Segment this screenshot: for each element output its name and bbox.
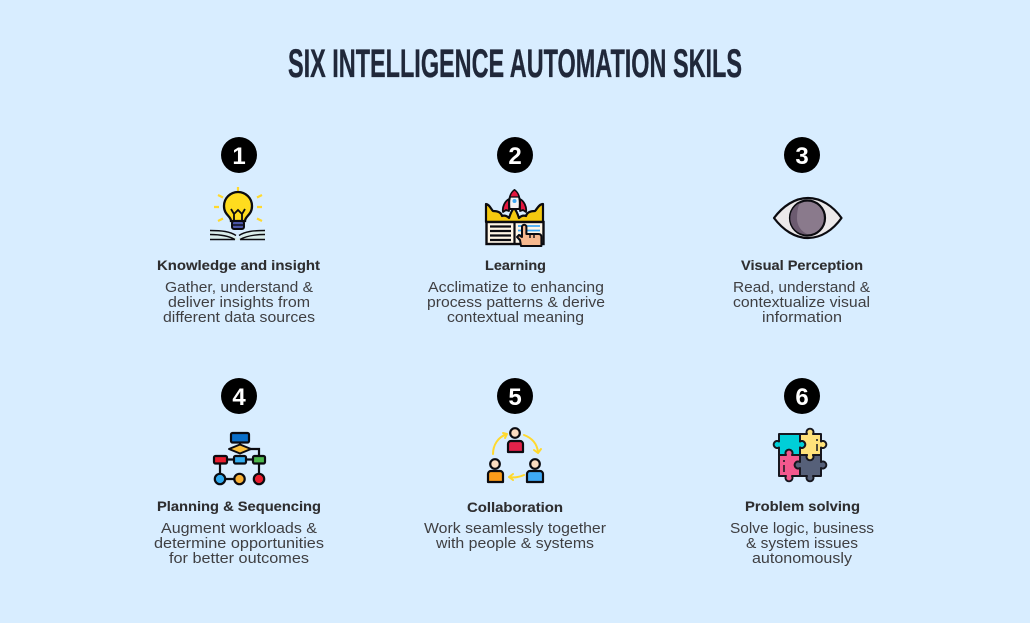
description: problem solving: autonomously xyxy=(752,551,853,567)
number badge 3: 3 xyxy=(795,143,809,170)
description: visual perception xyxy=(733,280,870,326)
number badge 2: 2 xyxy=(508,143,522,170)
icon: jigsaw puzzle xyxy=(774,429,826,481)
description: learning xyxy=(427,280,605,326)
number badge 3 xyxy=(784,137,820,173)
number badge 6 xyxy=(784,378,820,414)
panel: planning and sequencing xyxy=(154,378,324,567)
description: knowledge and insight: Gather, understand & xyxy=(165,280,313,296)
icon: three people with circular arrows xyxy=(488,428,543,482)
heading: learning: Learning xyxy=(485,257,546,273)
description: learning: Acclimatize to enhancing xyxy=(428,280,604,296)
description: visual perception: information xyxy=(762,310,842,326)
heading: planning and sequencing: Planning & Sequencing xyxy=(157,498,321,514)
number badge 4 xyxy=(221,378,257,414)
description: learning: process patterns & derive xyxy=(427,295,605,311)
heading: problem solving: Problem solving xyxy=(745,498,860,514)
description: learning: contextual meaning xyxy=(447,310,584,326)
description: problem solving xyxy=(730,521,874,567)
panel: learning xyxy=(427,137,605,326)
number badge 2 xyxy=(497,137,533,173)
description: visual perception: Read, understand & xyxy=(733,280,870,296)
panel: visual perception xyxy=(733,137,870,326)
icon: flowchart xyxy=(214,433,265,484)
heading: collaboration: Collaboration xyxy=(467,499,563,515)
number badge 6: 6 xyxy=(795,384,809,411)
description: planning and sequencing: for better outcomes xyxy=(169,551,309,567)
description: collaboration xyxy=(424,521,606,552)
heading: knowledge and insight: Knowledge and insight xyxy=(157,257,320,273)
panel: knowledge and insight xyxy=(157,137,320,326)
heading: visual perception: Visual Perception xyxy=(741,257,863,273)
description: planning and sequencing: Augment workloads & xyxy=(161,521,317,537)
number badge 5: 5 xyxy=(508,384,522,411)
panel: problem solving xyxy=(730,378,874,567)
description: knowledge and insight: different data sources xyxy=(163,310,315,326)
description: collaboration: with people & systems xyxy=(435,536,594,552)
panel: collaboration xyxy=(424,378,606,552)
description: problem solving: Solve logic, business xyxy=(730,521,874,537)
icon: rocket launching from open book xyxy=(486,190,544,246)
description: problem solving: & system issues xyxy=(746,536,858,552)
description: visual perception: contextualize visual xyxy=(733,295,870,311)
number badge 1: 1 xyxy=(232,143,246,170)
description: collaboration: Work seamlessly together xyxy=(424,521,606,537)
number badge 4: 4 xyxy=(232,384,246,411)
description: knowledge and insight: deliver insights from xyxy=(168,295,310,311)
description: knowledge and insight xyxy=(163,280,315,326)
description: planning and sequencing: determine opportunities xyxy=(154,536,324,552)
number badge 5 xyxy=(497,378,533,414)
description: planning and sequencing xyxy=(154,521,324,567)
icon: eye xyxy=(774,198,842,238)
icon: light bulb over open book xyxy=(210,187,265,240)
number badge 1 xyxy=(221,137,257,173)
